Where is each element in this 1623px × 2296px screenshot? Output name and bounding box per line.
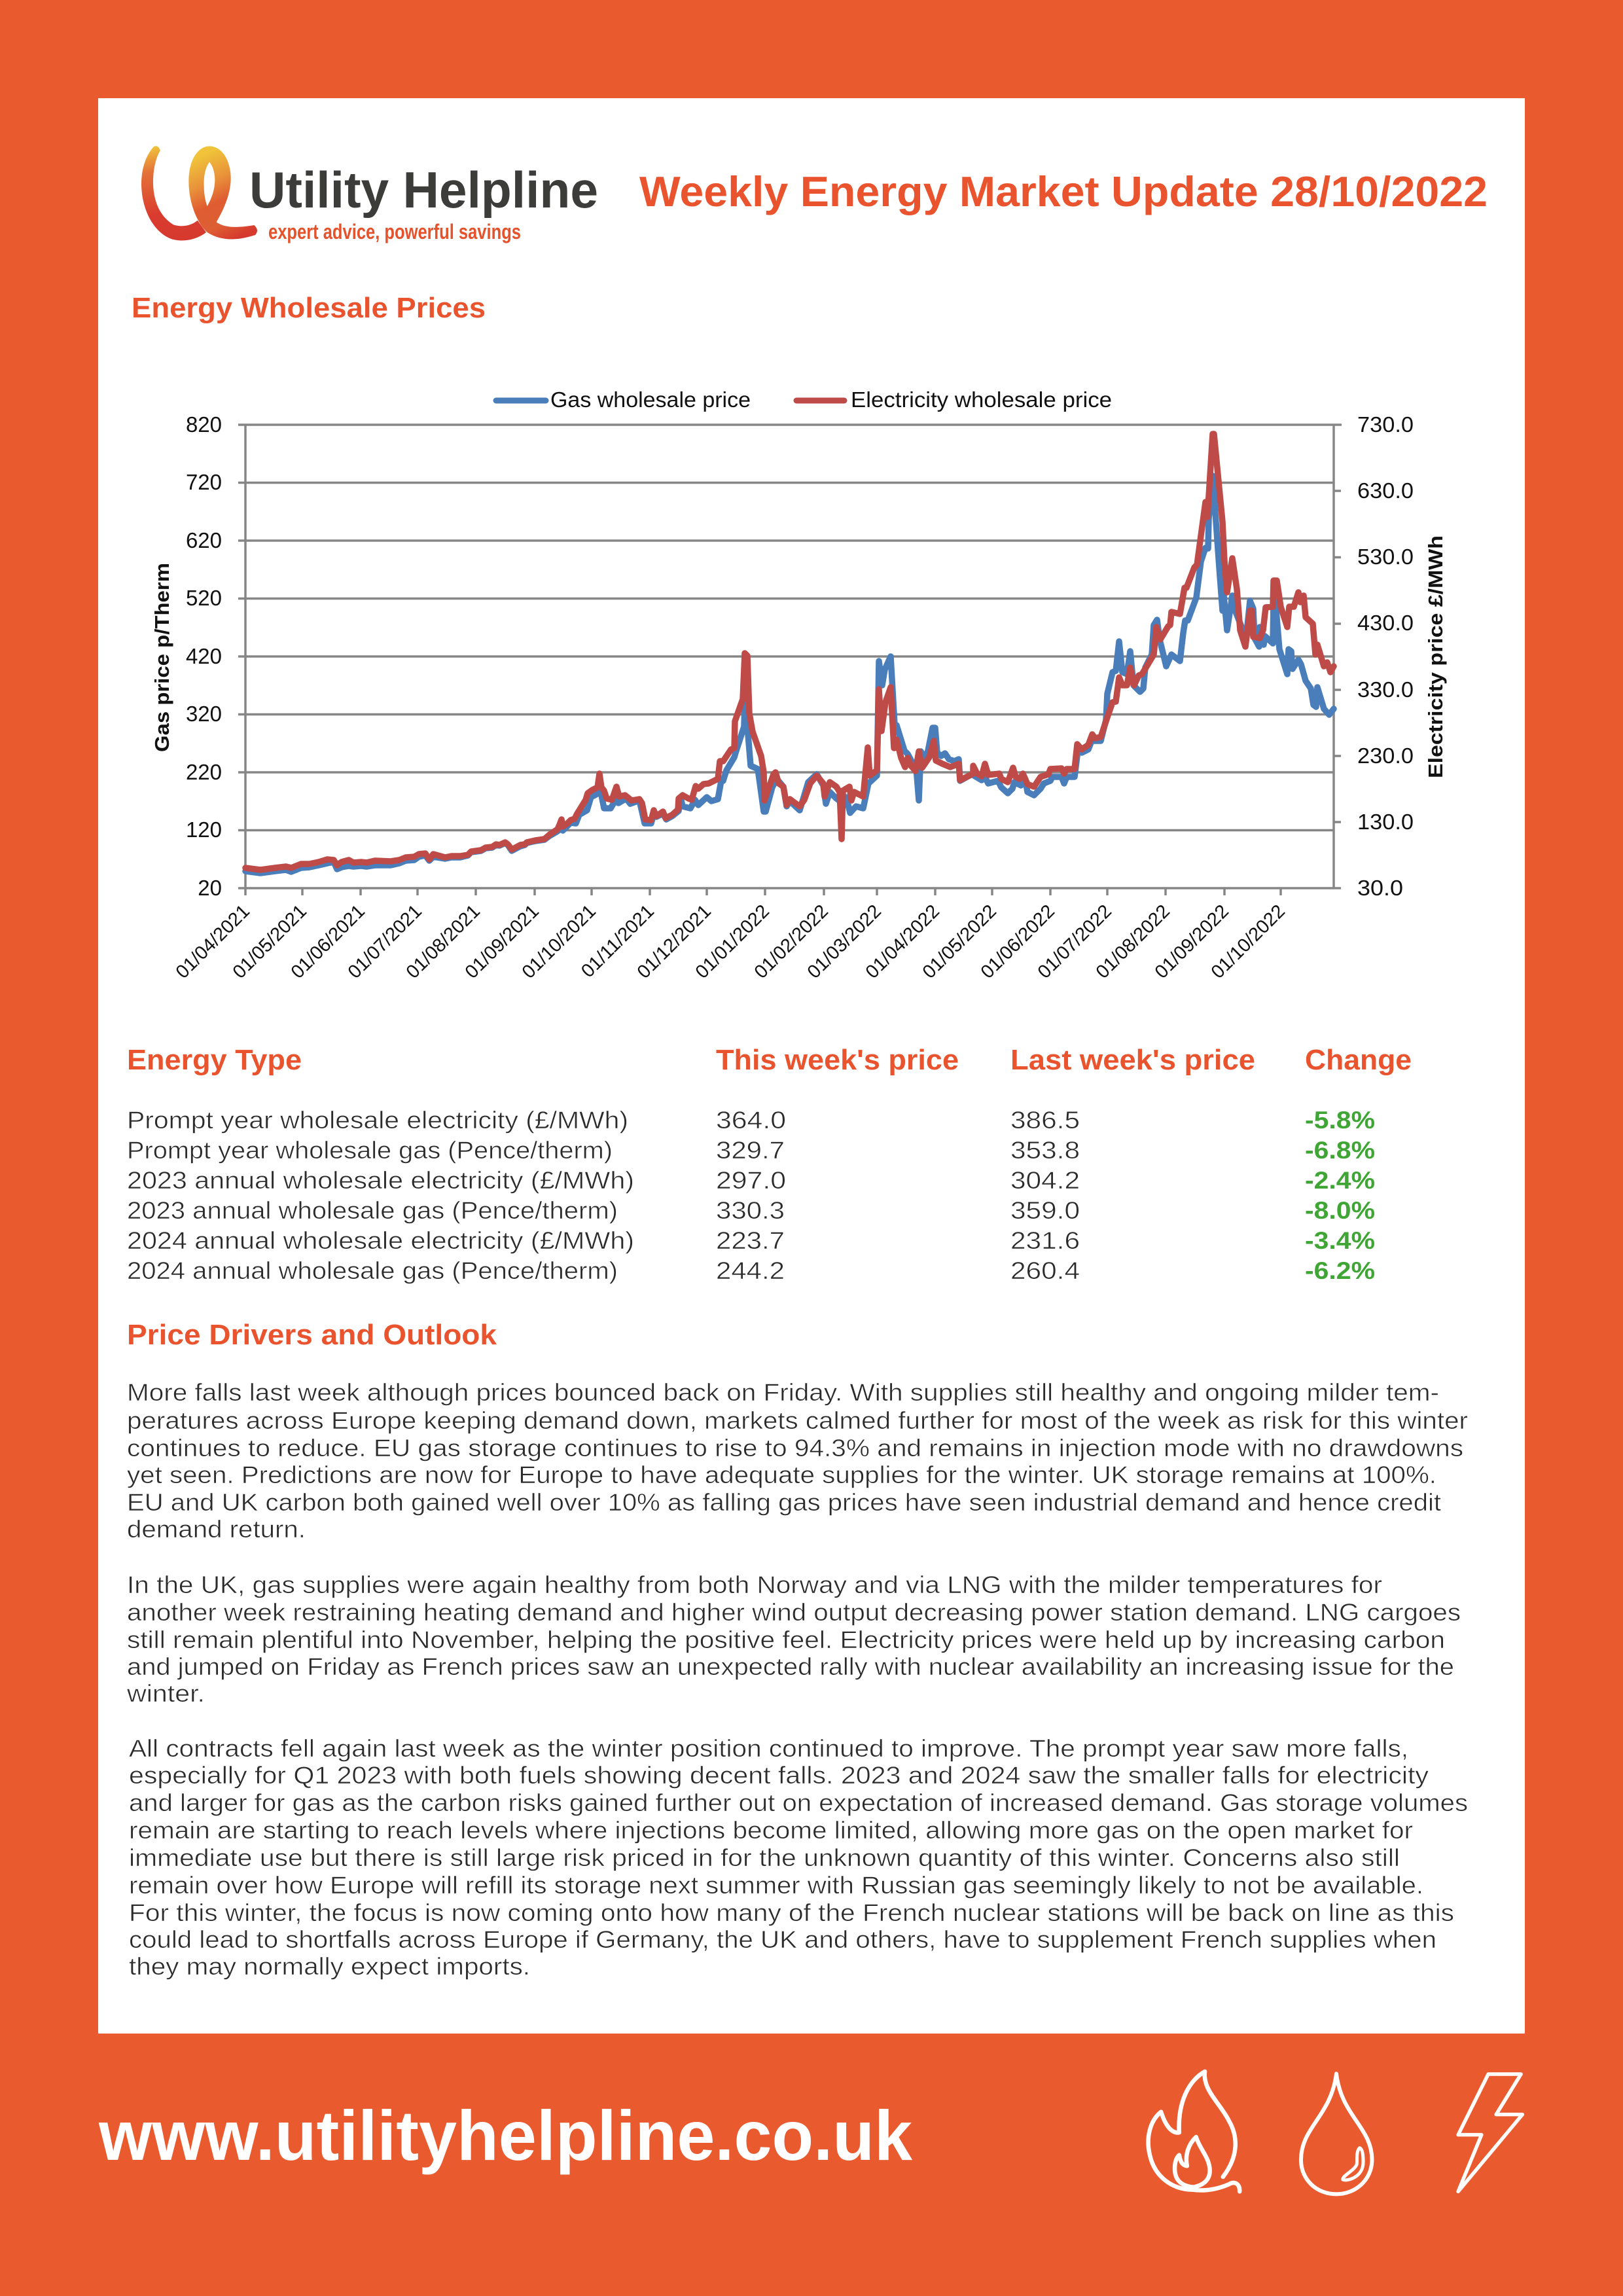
table row: prompt electricity: 386.5 [1010,1107,1080,1134]
text block: paragraph 2: another week restraining heating demand and higher wind output decreasing power station demand. LNG cargoes [127,1599,1461,1626]
left axis labels: 120 [186,817,222,842]
table row: prompt gas: 353.8 [1010,1137,1080,1164]
text block: paragraph 1: More falls last week although prices bounced back on Friday. With supplies still healthy and ongoing milder tem- [127,1379,1439,1406]
table row: 2023 electricity: 2023 annual wholesale electricity (£/MWh) [127,1167,634,1194]
text block: paragraph 3: remain are starting to reach levels where injections become limited, allowing more gas on the open market for [129,1817,1413,1844]
date axis labels: 01/02/2022 [751,901,832,983]
date axis labels: 01/09/2022 [1151,901,1233,983]
text block: paragraph 3: For this winter, the focus is now coming onto how many of the French nuclear stations will be back on line as this [129,1899,1454,1926]
text block: paragraph 1: continues to reduce. EU gas storage continues to rise to 94.3% and remains in injection mode with no drawdowns [127,1435,1463,1462]
table row: 2024 electricity [127,1227,1375,1254]
chart: gas and electricity wholesale prices [151,387,1447,983]
table row: 2024 electricity: 2024 annual wholesale electricity (£/MWh) [127,1227,634,1254]
table row: 2023 gas: 2023 annual wholesale gas (Pence/therm) [127,1197,618,1224]
date axis labels: 01/05/2021 [229,901,311,983]
chart axes and gridlines [238,425,1342,895]
right axis labels: 530.0 [1357,545,1414,569]
left axis labels: 820 [186,412,222,437]
text block: paragraph 3: remain over how Europe will refill its storage next summer with Russian gas seemingly likely to not be available. [129,1872,1423,1899]
table row: 2024 electricity: 223.7 [716,1227,785,1254]
date axis labels: 01/12/2021 [633,901,715,983]
text block: paragraph 3: especially for Q1 2023 with both fuels showing decent falls. 2023 and 2024 saw the smaller falls for electricity [129,1762,1429,1789]
left axis labels: 320 [186,702,222,726]
table row: prompt electricity: 364.0 [716,1107,786,1134]
table row: 2024 electricity: -3.4% [1305,1227,1375,1254]
date axis labels: 01/04/2022 [862,901,944,983]
text block: paragraph 1: yet seen. Predictions are now for Europe to have adequate supplies for the winter. UK storage remains at 100%. [127,1462,1436,1488]
table row: 2024 gas [127,1257,1375,1284]
date axis labels: 01/07/2022 [1034,901,1116,983]
left axis labels: 620 [186,528,222,552]
text block: paragraph 2: and jumped on Friday as French prices saw an unexpected rally with nuclear availability an increasing issue for the [127,1653,1454,1680]
date axis labels: 01/03/2022 [804,901,885,983]
right axis labels: 630.0 [1357,478,1414,503]
table header row: Change [1305,1044,1412,1076]
left axis labels [186,412,222,900]
text block: paragraph 1: peratures across Europe keeping demand down, markets calmed further for most of the week as risk for this winter [127,1407,1468,1434]
date axis labels: 01/05/2022 [919,901,1001,983]
text block: paragraph 1: EU and UK carbon both gained well over 10% as falling gas prices have seen industrial demand and hence credit [127,1489,1442,1516]
table row: 2024 gas: -6.2% [1305,1257,1375,1284]
icon: gas flame [1149,2072,1240,2191]
text block: paragraph 3: and larger for gas as the carbon risks gained further out on expectation of increased demand. Gas storage volumes [129,1789,1468,1816]
icon: lightning bolt [1458,2074,1522,2191]
table row: prompt gas [127,1137,1375,1164]
right axis labels: 730.0 [1357,412,1414,437]
table header row: Energy Type [127,1044,302,1076]
line: electricity wholesale price [245,434,1334,870]
right axis title: Electricity price £/MWh [1424,535,1447,778]
date axis labels: 01/10/2022 [1207,901,1289,983]
left axis labels: 20 [198,876,222,900]
text block: paragraph 3: could lead to shortfalls across Europe if Germany, the UK and others, have to supplement French supplies when [129,1926,1436,1953]
date axis labels: 01/06/2022 [977,901,1059,983]
right axis labels: 330.0 [1357,677,1414,702]
table row: prompt gas: Prompt year wholesale gas (Pence/therm) [127,1137,613,1164]
right axis labels: 230.0 [1357,744,1414,768]
logo: Utility Helpline [141,146,598,243]
table row: prompt electricity [127,1107,1375,1134]
table row: 2024 gas: 2024 annual wholesale gas (Pence/therm) [127,1257,618,1284]
line: gas wholesale price [245,476,1334,873]
date axis labels: 01/09/2021 [461,901,543,983]
table row: 2023 electricity: 304.2 [1010,1167,1080,1194]
legend: Gas wholesale price [550,387,751,412]
table row: 2023 electricity [127,1167,1375,1194]
text block: paragraph 3: All contracts fell again last week as the winter position continued to improve. The prompt year saw more falls, [129,1735,1408,1762]
right axis labels: 130.0 [1357,810,1414,834]
heading: Energy Wholesale Prices: Energy Wholesale Prices [132,292,486,324]
table row: 2023 gas [127,1197,1375,1224]
icon: water drop [1301,2073,1372,2194]
right axis labels: 30.0 [1357,876,1403,900]
date axis labels [172,901,1289,983]
right axis labels: 430.0 [1357,611,1414,635]
table row: 2023 electricity: -2.4% [1305,1167,1375,1194]
left axis labels: 720 [186,470,222,494]
left axis labels: 220 [186,760,222,784]
text block: paragraph 2: In the UK, gas supplies were again healthy from both Norway and via LNG with the milder temperatures for [127,1571,1382,1598]
text block: paragraph 2: still remain plentiful into November, helping the positive feel. Electricity prices were held up by increasing carbon [127,1626,1445,1653]
icon: logo ribbon [141,146,257,240]
legend: Electricity wholesale price [851,387,1112,412]
text block: paragraph 3: immediate use but there is still large risk priced in for the unknown quantity of this winter. Concerns also still [129,1844,1400,1871]
table header row [127,1044,1412,1076]
table row: prompt electricity: -5.8% [1305,1107,1375,1134]
table row: 2023 gas: 359.0 [1010,1197,1080,1224]
table row: 2024 electricity: 231.6 [1010,1227,1080,1254]
table row: 2023 gas: -8.0% [1305,1197,1375,1224]
table header row: This week's price [716,1044,959,1076]
text block: paragraph 2 [126,1571,1461,1707]
text block: paragraph 1: demand return. [127,1516,306,1543]
date axis labels: 01/01/2022 [692,901,774,983]
heading: Price Drivers and Outlook: Price Drivers and Outlook [127,1319,497,1351]
logo wordmark: Utility Helpline [249,161,598,219]
table row: prompt gas: 329.7 [716,1137,785,1164]
date axis labels: 01/04/2021 [172,901,254,983]
date axis labels: 01/06/2021 [287,901,369,983]
logo tagline: expert advice, powerful savings [268,220,521,243]
date axis labels: 01/08/2021 [402,901,484,983]
right axis labels [1357,412,1414,900]
text block: paragraph 3 [129,1735,1468,1980]
text block: paragraph 3: they may normally expect imports. [129,1953,530,1980]
table row: 2024 gas: 244.2 [716,1257,785,1284]
title: Weekly Energy Market Update 28/10/2022 [639,168,1488,215]
date axis labels: 01/10/2021 [518,901,600,983]
table header row: Last week's price [1010,1044,1255,1076]
left axis labels: 420 [186,644,222,668]
left axis labels: 520 [186,586,222,610]
table row: 2024 gas: 260.4 [1010,1257,1080,1284]
date axis labels: 01/11/2021 [577,901,658,982]
legend [496,387,1112,412]
text block: paragraph 2: winter. [126,1680,205,1707]
left axis title: Gas price p/Therm [151,563,173,752]
table row: prompt electricity: Prompt year wholesale electricity (£/MWh) [127,1107,628,1134]
text block: paragraph 1 [127,1379,1468,1543]
table row: 2023 gas: 330.3 [716,1197,785,1224]
panel: white content [98,98,1525,2034]
footer: website address: www.utilityhelpline.co.uk [98,2096,913,2175]
date axis labels: 01/08/2022 [1092,901,1174,983]
table row: prompt gas: -6.8% [1305,1137,1375,1164]
table row: 2023 electricity: 297.0 [716,1167,786,1194]
date axis labels: 01/07/2021 [344,901,426,983]
table: energy prices [127,1044,1412,1284]
